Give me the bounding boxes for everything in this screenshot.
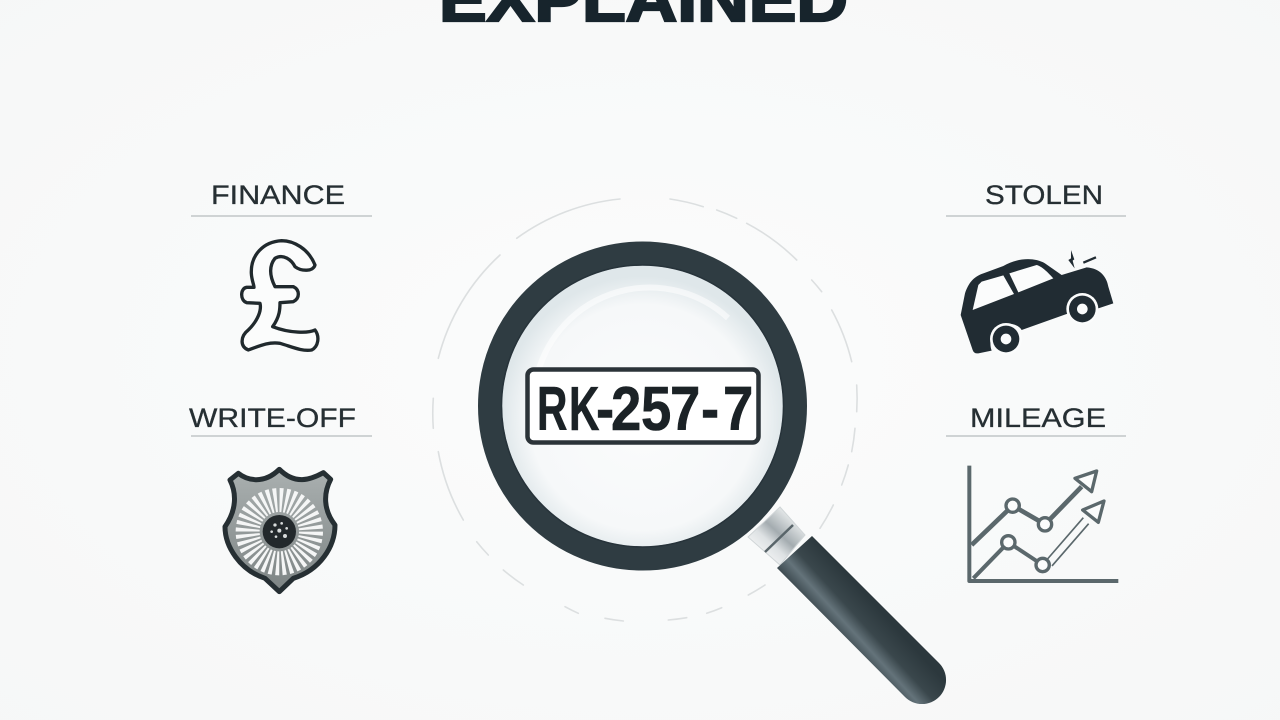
magnifying glass (490, 254, 946, 704)
stolen heading: STOLEN (985, 180, 1103, 210)
icon: pound sign (242, 241, 318, 350)
ferrule (748, 507, 805, 565)
number plate: -257-7 (596, 375, 753, 444)
finance heading: FINANCE (211, 180, 345, 210)
dashed orbit ring (433, 199, 857, 621)
icon: shield (225, 469, 335, 592)
panel: mileage (946, 403, 1126, 581)
panel: write-off (189, 403, 372, 592)
icon: line chart (969, 466, 1118, 581)
number plate: RK (537, 375, 599, 444)
panel: stolen (946, 180, 1126, 355)
number plate (528, 370, 758, 444)
lens and rim (490, 254, 795, 558)
handle (777, 536, 946, 704)
icon: car (961, 250, 1113, 355)
mileage heading: MILEAGE (970, 403, 1106, 433)
write-off heading: WRITE-OFF (189, 403, 356, 433)
panel: finance (191, 180, 372, 350)
